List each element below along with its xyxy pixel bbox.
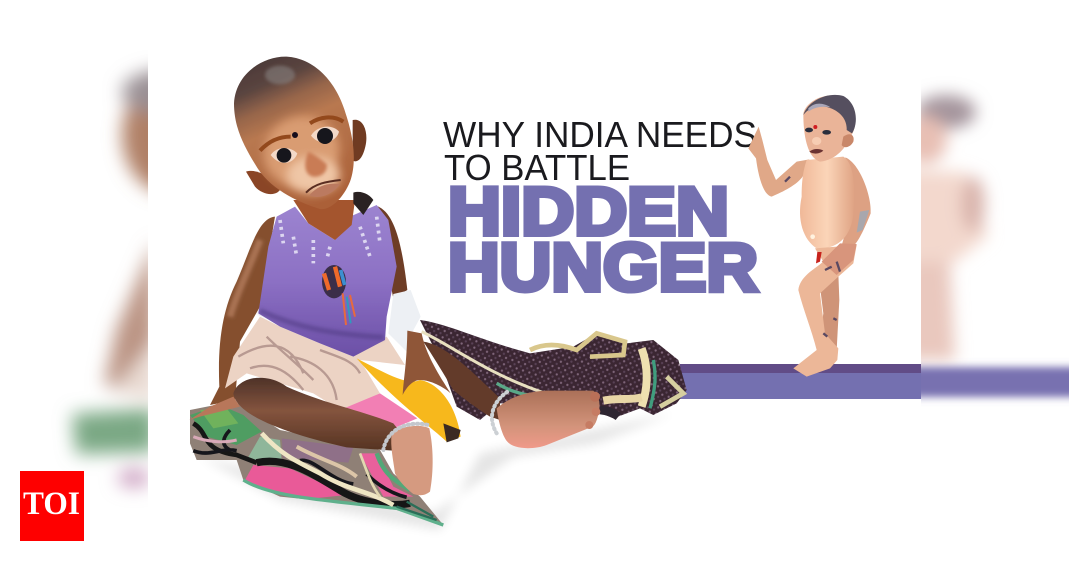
left hand on blanket [189,397,240,420]
right ear [353,120,366,161]
blurred backdrop: right [900,95,1069,397]
right leg and foot [423,342,600,448]
center white panel [148,0,921,580]
pink cloth [340,393,417,428]
heading line 2: TO BATTLE [444,147,630,188]
banana [357,358,461,442]
anklets [383,390,510,450]
neck [293,200,355,240]
TOI logo [20,471,84,541]
drop shadow [200,413,673,530]
large seated child with blanket [189,57,687,530]
purple platform bar [680,364,921,399]
facial features [805,125,831,154]
eyes and bindi [260,117,343,163]
head [803,95,855,162]
nose and mouth [305,152,341,197]
knit blanket [420,320,687,420]
hand on thigh [822,243,857,275]
TOI logo: TOI [23,486,80,522]
heading HIDDEN: HIDDEN [448,174,729,250]
front leg and foot [793,245,857,377]
heading line 1: WHY INDIA NEEDS [443,114,757,155]
bandage on wrist [388,290,421,352]
title text [443,114,758,306]
left ear [246,171,282,194]
torso [800,157,854,248]
blurred backdrop: left [60,60,148,498]
heading HUNGER: HUNGER [448,230,758,306]
raised arm [748,127,809,197]
small standing child [748,95,871,377]
head with hair and face tones [234,57,354,209]
forearm holding banana [403,331,451,395]
left arm [210,217,275,405]
right arm [842,157,871,246]
left leg and foot [233,378,433,495]
bottom blanket [190,403,443,525]
ribbon brooch [322,265,355,325]
skin marks [785,177,840,337]
skirt [225,317,405,410]
purple dress [258,205,397,357]
back leg [818,273,839,350]
right upper arm [377,206,407,298]
